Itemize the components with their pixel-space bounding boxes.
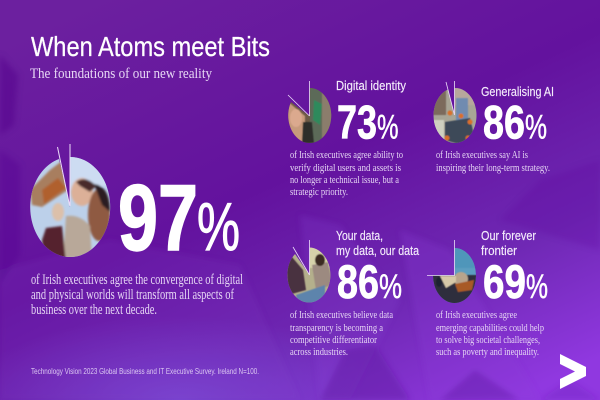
number 86%: 86 <box>337 255 379 308</box>
big number 97%: 97 <box>118 165 198 270</box>
wedge lines <box>58 144 70 206</box>
wedge lines <box>293 240 310 275</box>
description: business over the next decade. <box>31 302 157 318</box>
description: competitive differentiator <box>290 335 377 346</box>
description: no longer a technical issue, but a <box>290 175 399 186</box>
wedge lines <box>427 240 454 276</box>
description: of Irish executives believe data <box>290 310 393 321</box>
pie photo: people and glowing globe at dusk <box>427 240 479 305</box>
description <box>290 150 403 198</box>
description: emerging capabilities could help <box>436 323 544 334</box>
description: of Irish executives agree ability to <box>290 150 403 161</box>
description: of Irish executives agree the convergence of digital <box>31 272 243 288</box>
panel: 97% convergence stat: % <box>197 189 240 265</box>
panel: digital identity: % <box>377 108 398 146</box>
wedge lines <box>288 81 310 116</box>
panel: our forever frontier: % <box>526 268 548 306</box>
heading: frontier <box>481 243 518 258</box>
heading: Generalising AI <box>481 84 554 99</box>
description <box>436 310 544 358</box>
description: across industries. <box>290 347 348 358</box>
description: verify digital users and assets is <box>290 163 401 174</box>
description: and physical worlds will transform all aspects of <box>31 287 234 303</box>
number 69%: 69 <box>483 255 526 308</box>
heading: Your data, <box>336 228 383 243</box>
description: transparency is becoming a <box>290 323 383 334</box>
pie photo: person with laptop <box>287 240 330 302</box>
description: of Irish executives agree <box>436 310 517 321</box>
panel: your data: % <box>379 268 402 306</box>
description <box>290 310 393 358</box>
panel: generalising AI <box>431 81 554 174</box>
pie photo: hand and green figure <box>288 81 332 143</box>
number 73%: 73 <box>337 96 377 148</box>
pie photo: robot with orange spheres <box>434 81 476 143</box>
panel: 97% convergence stat <box>28 144 243 318</box>
number 86%: 86 <box>483 96 525 148</box>
pie photo: child and parent at a festival <box>28 144 112 262</box>
panel: your data <box>286 228 420 358</box>
description <box>436 150 550 174</box>
panel: generalising AI: % <box>525 108 547 146</box>
wedge lines <box>446 81 454 115</box>
panel: our forever frontier <box>427 228 548 358</box>
panel: digital identity <box>286 78 406 198</box>
icon: accenture chevron logo <box>560 354 586 389</box>
heading: Our forever <box>481 228 537 243</box>
description <box>31 272 243 318</box>
description: strategic priority. <box>290 187 348 198</box>
heading: my data, our data <box>336 243 420 258</box>
description: of Irish executives say AI is <box>436 150 528 161</box>
subtitle: The foundations of our new reality <box>30 66 212 82</box>
heading <box>481 228 537 258</box>
title: When Atoms meet Bits <box>31 31 270 62</box>
description: such as poverty and inequality. <box>436 347 539 358</box>
heading: Digital identity <box>336 78 406 93</box>
description: inspiring their long-term strategy. <box>436 163 550 174</box>
footnote: Technology Vision 2023 Global Business and IT Executive Survey. Ireland N=100. <box>31 366 259 376</box>
description: to solve big societal challenges, <box>436 335 540 346</box>
heading <box>336 228 420 258</box>
